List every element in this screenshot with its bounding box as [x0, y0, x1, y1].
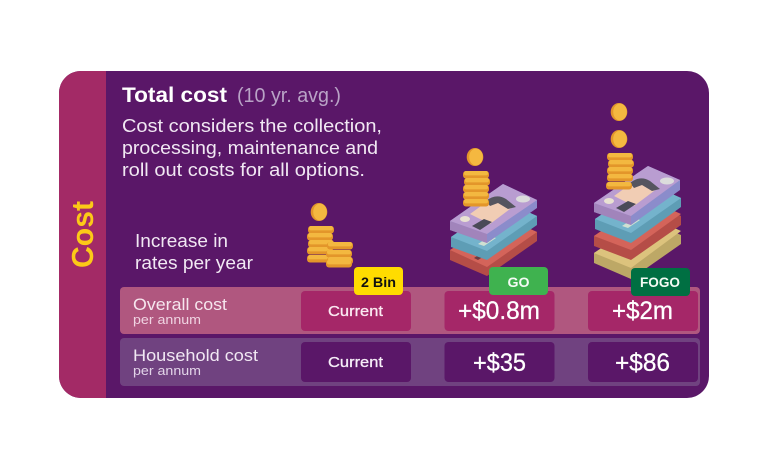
cell: GO household [444, 342, 554, 382]
cell: FOGO household [588, 342, 698, 382]
blue note [451, 201, 537, 260]
cell: FOGO overall [588, 291, 698, 331]
cell: 2 Bin overall [301, 291, 411, 331]
cell: GO household: +$35 [473, 349, 526, 377]
coin stack [606, 103, 634, 190]
purple note [594, 166, 680, 225]
badge: FOGO: FOGO [640, 274, 680, 290]
description text: processing, maintenance and [122, 138, 378, 158]
description text: roll out costs for all options. [122, 160, 365, 180]
yellow note [594, 216, 681, 279]
badge: 2 Bin [354, 267, 403, 295]
heading: Total cost: (10 yr. avg.) [237, 85, 341, 107]
blue note [595, 183, 681, 243]
cell: 2 Bin household [301, 342, 411, 382]
side label: Cost: Cost [65, 201, 100, 268]
label: household cost: Household cost [133, 346, 258, 365]
row label: increase in rates per year: rates per year [135, 253, 253, 273]
badge: FOGO [631, 268, 690, 296]
red note [594, 199, 681, 260]
icon: GO banknotes and coins [450, 148, 537, 276]
badge: GO [489, 267, 548, 295]
label: overall cost [133, 295, 227, 327]
label: household cost [133, 346, 258, 378]
purple note [450, 184, 537, 243]
cell: FOGO overall: +$2m [612, 297, 673, 325]
row: overall cost [120, 287, 700, 334]
coin stack [463, 148, 490, 206]
row label: increase in rates per year [135, 231, 253, 273]
description text: Cost considers the collection, [122, 116, 382, 136]
description text [122, 116, 382, 180]
row: household cost [120, 338, 700, 386]
badge: GO: GO [508, 274, 530, 290]
red note [450, 217, 537, 276]
badge: 2 Bin: 2 Bin [361, 274, 396, 290]
side strip [59, 71, 106, 398]
cell: 2 Bin household: Current [328, 354, 384, 371]
heading: Total cost: Total cost [122, 84, 227, 107]
icon: FOGO banknotes and coins [594, 103, 681, 279]
label: overall cost: Overall cost [133, 295, 227, 314]
panel: cost [59, 71, 709, 398]
cell: GO overall: +$0.8m [458, 297, 540, 325]
label: overall cost: per annum [133, 312, 201, 327]
label: household cost: per annum [133, 363, 201, 378]
heading: Total cost [122, 84, 341, 107]
row label: increase in rates per year: Increase in [135, 231, 228, 251]
cell: FOGO household: +$86 [615, 349, 670, 377]
icon: 2 Bin coins [307, 203, 353, 268]
cell: GO overall [444, 291, 554, 331]
cell: 2 Bin overall: Current [328, 303, 384, 320]
